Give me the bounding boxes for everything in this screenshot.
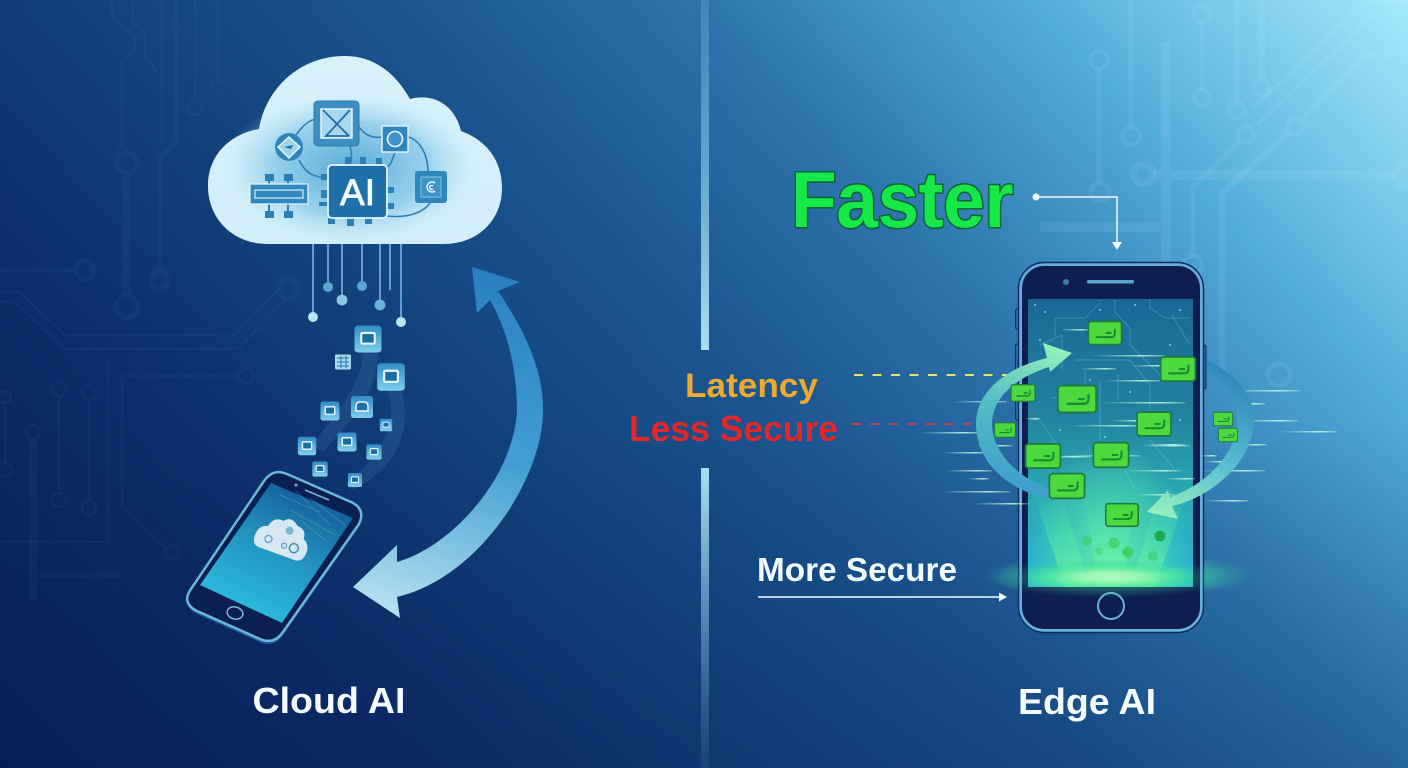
green data chips	[995, 321, 1238, 526]
panel: Edge AI	[629, 155, 1337, 722]
arrow: cloud to device round trip	[353, 267, 543, 618]
center divider	[701, 0, 709, 768]
icon: swirl box	[415, 171, 447, 203]
label: More Secure: More Secure	[757, 551, 957, 588]
connector arrow: Faster to phone	[1032, 194, 1122, 250]
green particles	[1082, 530, 1166, 561]
text: AI: AI	[340, 172, 375, 213]
cloud connectors	[296, 119, 430, 216]
base glow band	[1028, 562, 1193, 587]
icon: AI chip	[319, 157, 394, 226]
label: Edge AI: Edge AI	[1018, 681, 1156, 722]
icon: circle box	[382, 126, 408, 152]
dashed line: latency	[854, 374, 1010, 376]
label: Latency: Latency	[685, 367, 818, 405]
circuit pattern right	[1040, 0, 1408, 386]
phone screen	[1028, 299, 1193, 587]
streaks outside phone	[920, 390, 1337, 504]
streaks on screen	[1040, 329, 1195, 496]
icon: diamond badge	[275, 133, 303, 161]
label: Faster: Faster	[791, 155, 1013, 244]
cloud drop lines	[308, 244, 406, 327]
circuit pattern left	[0, 0, 298, 600]
dashed line: less secure	[852, 423, 975, 425]
label: Less Secure: Less Secure	[629, 408, 838, 449]
icon: smartphone	[1015, 262, 1206, 634]
icon: cloud on phone	[252, 510, 315, 563]
arrow: left circular arrow	[976, 343, 1072, 499]
panel: Cloud AI	[187, 56, 543, 721]
icon: picture box	[314, 101, 359, 146]
icon: tilted smartphone	[187, 472, 361, 644]
glow behind phone	[985, 551, 1255, 599]
label: Cloud AI: Cloud AI	[252, 680, 406, 721]
data tiles	[298, 326, 405, 487]
icon: bar module	[250, 174, 308, 218]
arrow: More Secure to phone	[758, 592, 1007, 602]
icon: cloud	[208, 56, 502, 244]
glow over phone edge	[985, 558, 1235, 598]
arrow: right circular arrow	[1147, 361, 1254, 519]
data stream bands	[312, 342, 378, 452]
